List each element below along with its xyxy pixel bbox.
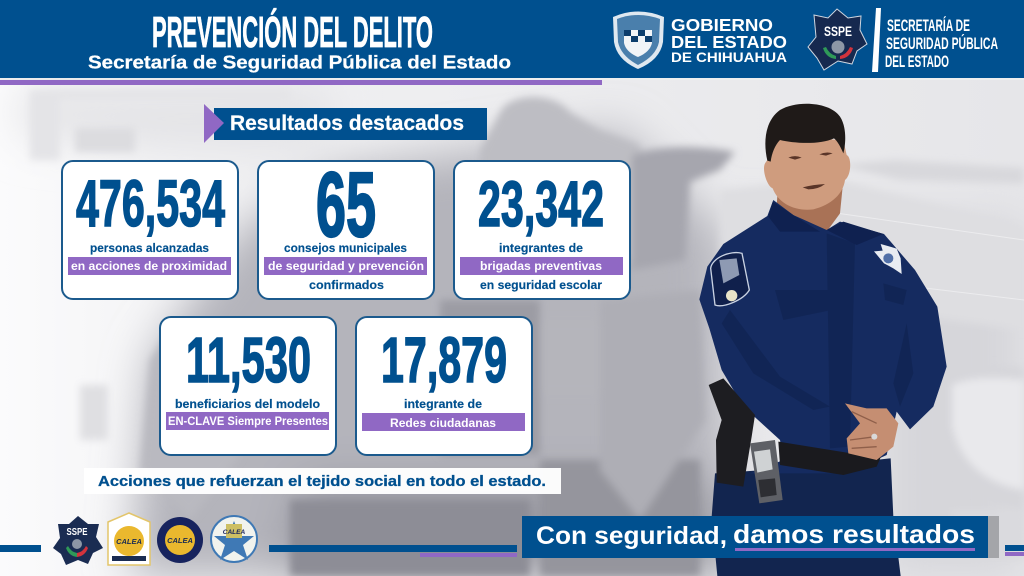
highlight text: en acciones de proximidad — [71, 259, 227, 273]
slogan banner — [522, 516, 999, 558]
clasped hands — [845, 403, 898, 460]
header band — [0, 0, 1024, 85]
highlight text: brigadas preventivas — [480, 259, 602, 273]
logo: CALEA seal: CALEA — [167, 536, 193, 545]
stat number: 11,530 — [186, 324, 311, 396]
bottom rule right — [1005, 545, 1024, 556]
icon: purple arrow — [204, 104, 224, 143]
stat label: consejos municipales — [284, 241, 407, 255]
highlight text: de seguridad y prevención — [268, 259, 424, 273]
subtitle: Secretaría de Seguridad Pública del Estado — [88, 52, 511, 72]
logo divider — [872, 8, 881, 72]
logo wordmark — [671, 15, 787, 65]
caption strip — [84, 468, 561, 494]
neck — [777, 180, 843, 232]
stat label: beneficiarios del modelo — [175, 397, 320, 411]
logo text: Secretaría de Seguridad Pública del Estado: SECRETARÍA DE — [887, 16, 970, 35]
bottom rule left — [0, 545, 41, 552]
stat number: 23,342 — [478, 168, 604, 240]
logo: SSPE star badge — [808, 9, 867, 70]
slogan emphasis: damos resultados — [733, 519, 975, 549]
collar — [768, 202, 883, 245]
shirt shading — [722, 233, 913, 448]
logo: SSPE badge small — [53, 516, 103, 565]
uniform shirt — [699, 200, 947, 473]
logo: CALEA seal — [157, 517, 203, 563]
radio — [750, 440, 783, 503]
stat label: integrante de — [404, 397, 482, 411]
duty belt — [778, 442, 882, 475]
stat number: 17,879 — [381, 324, 507, 396]
stat number: 476,534 — [76, 166, 225, 240]
card: 476,534 — [62, 161, 238, 299]
logo text: Secretaría de Seguridad Pública del Estado — [885, 16, 998, 71]
trousers — [712, 458, 901, 576]
stat number: 65 — [316, 154, 376, 256]
logo wordmark: DEL ESTADO — [671, 32, 787, 52]
purple highlight — [68, 257, 231, 275]
slogan text: Con seguridad, — [536, 522, 727, 550]
logo: SSPE star badge: SSPE — [824, 24, 852, 39]
logo: CALEA shield — [108, 513, 150, 565]
purple highlight — [166, 412, 329, 430]
purple highlight — [460, 257, 623, 275]
stat label: integrantes de — [499, 241, 583, 255]
highlight text: EN-CLAVE Siempre Presentes — [168, 416, 328, 428]
header band: PREVENCIÓN DEL DELITO — [152, 7, 433, 57]
card: 17,879 — [356, 317, 532, 455]
icon: state shield — [613, 12, 664, 69]
face — [764, 137, 850, 210]
card: 23,342 — [454, 161, 630, 299]
logo: CALEA shield: CALEA — [116, 537, 142, 546]
hair — [765, 104, 845, 162]
stat label: personas alcanzadas — [90, 241, 209, 255]
logo wordmark: GOBIERNO — [671, 15, 773, 35]
eyes and mouth — [788, 153, 833, 189]
purple highlight — [264, 257, 427, 275]
logo: SSPE badge small: SSPE — [66, 526, 88, 538]
logo: CALEA star seal: CALEA — [223, 529, 245, 536]
logo wordmark: DE CHIHUAHUA — [671, 50, 787, 65]
logo: CALEA star seal — [211, 516, 257, 562]
caption strip: Acciones que refuerzan el tejido social en todo el estado. — [98, 473, 546, 490]
section heading: Resultados destacados: Resultados destacados — [230, 112, 464, 135]
shoulder patch — [711, 253, 749, 306]
logo text: Secretaría de Seguridad Pública del Estado: DEL ESTADO — [885, 52, 949, 71]
card: 65 — [258, 154, 434, 299]
highlight text: Redes ciudadanas — [390, 416, 496, 430]
officer photo illustration — [699, 104, 947, 576]
stat note: en seguridad escolar — [480, 278, 602, 292]
slogan underline — [735, 548, 975, 551]
purple highlight — [362, 413, 525, 431]
bottom rule centre — [269, 545, 517, 557]
holster — [709, 378, 755, 487]
card: 11,530 — [160, 317, 336, 455]
star badge — [874, 244, 902, 274]
section heading: Resultados destacados — [204, 104, 487, 143]
stat note: confirmados — [309, 278, 384, 292]
badge centre — [883, 253, 893, 263]
logo: Gobierno del Estado de Chihuahua — [613, 12, 787, 69]
